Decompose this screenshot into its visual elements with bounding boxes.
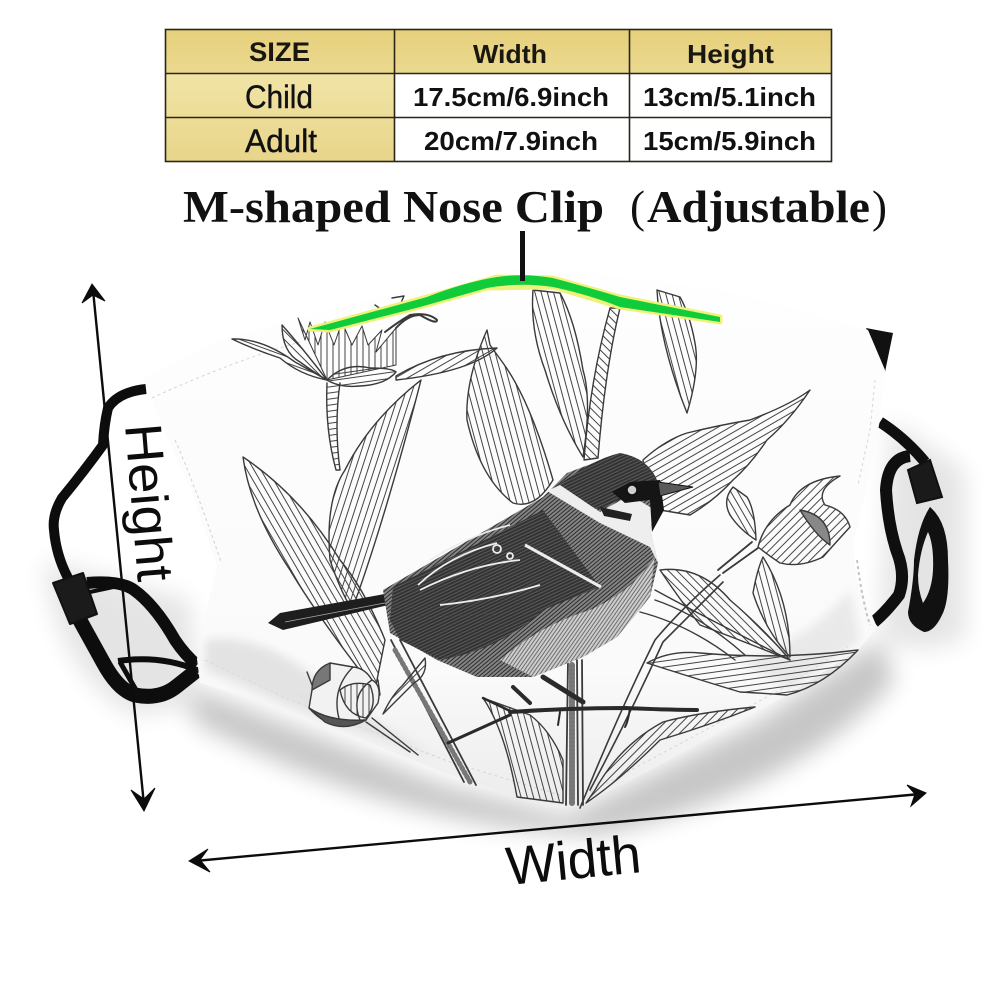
right flower xyxy=(718,476,850,657)
right ear loop xyxy=(866,328,948,632)
stems xyxy=(391,575,723,808)
width arrow xyxy=(189,785,926,872)
top center leaf xyxy=(532,290,588,457)
nose clip pointer xyxy=(520,231,525,281)
adult width: 20cm/7.9inch xyxy=(424,126,598,156)
nose clip bar xyxy=(310,275,720,330)
heading: adjustable: ( xyxy=(630,182,645,232)
center leaf xyxy=(467,330,553,504)
belly highlight xyxy=(500,555,655,677)
table header: width: Width xyxy=(473,39,547,69)
wing xyxy=(390,510,600,620)
lower left leaf xyxy=(243,457,385,690)
tail xyxy=(268,593,397,630)
mask seams and folds xyxy=(152,342,875,795)
tall leaf xyxy=(329,380,421,610)
row label: child: Child xyxy=(245,79,313,115)
botanical line art xyxy=(232,290,858,808)
size table xyxy=(166,30,832,162)
table header: height: Height xyxy=(687,39,774,69)
cheek patch xyxy=(600,507,632,521)
sparrow xyxy=(268,453,697,743)
leaf behind bird head xyxy=(643,390,810,515)
neck stripe xyxy=(547,485,658,563)
eye xyxy=(627,485,637,495)
lower right leaf xyxy=(586,707,755,803)
child width: 17.5cm/6.9inch xyxy=(413,82,609,112)
left flower stem xyxy=(327,383,340,470)
legs and branch xyxy=(448,677,697,743)
bottom right leaf xyxy=(647,650,858,695)
height label: Height xyxy=(113,421,184,584)
mask shadow xyxy=(45,420,965,835)
left ear loop xyxy=(53,389,197,696)
head xyxy=(552,453,657,510)
nose clip highlight xyxy=(310,277,720,330)
top right leaf xyxy=(657,290,696,413)
beak xyxy=(658,482,693,496)
heading: adjustable: Adjustable xyxy=(647,182,870,232)
nose clip heading: M-shaped Nose Clip xyxy=(183,182,604,232)
eye band xyxy=(612,480,664,532)
bud xyxy=(307,663,380,727)
leaf near bud xyxy=(383,658,426,714)
heading: adjustable: ) xyxy=(872,182,887,232)
body xyxy=(383,453,660,677)
height arrow xyxy=(82,284,155,811)
branch stem to bud xyxy=(366,718,418,755)
right side big leaf xyxy=(660,569,790,660)
child height: 13cm/5.1inch xyxy=(643,82,816,112)
adult height: 15cm/5.9inch xyxy=(643,126,816,156)
mask body xyxy=(143,268,885,806)
row label: adult: Adult xyxy=(245,123,317,159)
under-wing shadow xyxy=(390,610,543,660)
leaf under branch xyxy=(483,698,563,803)
width label: Width xyxy=(503,824,644,897)
left flower xyxy=(232,296,497,386)
top center stalk xyxy=(584,308,620,460)
table header: size: SIZE xyxy=(249,37,310,67)
